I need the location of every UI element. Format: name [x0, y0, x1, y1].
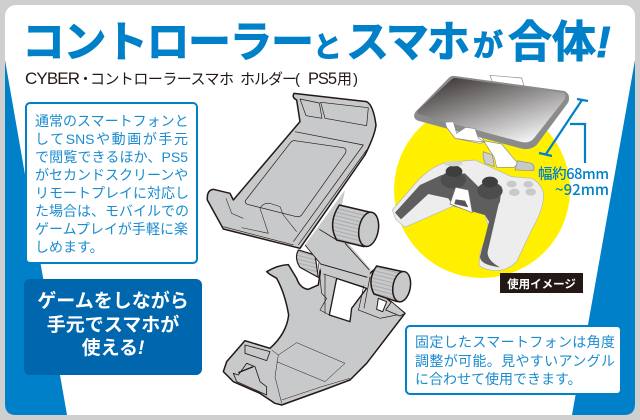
subtitle: CYBER	[25, 69, 80, 88]
upper knob	[333, 205, 369, 247]
smartphone	[414, 76, 569, 149]
subtitle	[25, 69, 358, 88]
holder upper cradle	[207, 93, 376, 248]
image caption	[500, 273, 583, 293]
holder lower base	[223, 263, 405, 405]
dark blue callout: 手元でスマホが	[47, 315, 179, 336]
lower knob	[371, 266, 403, 302]
phone mount arms	[445, 75, 534, 171]
width label: ~92mm	[555, 179, 609, 200]
left description box: しめます。	[35, 239, 104, 255]
dark blue callout	[24, 279, 202, 375]
left description box: た場合は、モバイルでの	[35, 203, 189, 219]
subtitle: (	[295, 71, 300, 88]
title: !	[596, 18, 611, 67]
controller illustration	[392, 160, 544, 271]
title: コントローラー	[22, 19, 314, 67]
dark blue callout: ゲームをしながら	[37, 291, 189, 312]
subtitle: PS5	[308, 70, 337, 88]
right description box: 調整が可能。見やすいアングル	[415, 353, 615, 369]
left blue wedge	[5, 60, 67, 415]
dark blue callout: 使える!	[82, 338, 144, 359]
subtitle: )	[353, 71, 358, 88]
left description box: リモートプレイに対応し	[35, 185, 189, 201]
left description box	[25, 102, 198, 264]
right description box: 固定したスマートフォンは角度	[415, 334, 615, 350]
width dimension marker	[539, 99, 588, 163]
title: 合体	[508, 18, 596, 67]
title	[22, 18, 611, 67]
left description box: ゲームプレイが手軽に楽	[35, 221, 188, 237]
width label: 幅約68mm	[538, 163, 609, 184]
left description box: してSNSや動画が手元	[35, 131, 188, 147]
title: スマホ	[346, 19, 470, 67]
subtitle: ホルダー	[240, 71, 297, 88]
image caption: 使用イメージ	[507, 277, 576, 291]
left description box: 通常のスマートフォンと	[35, 113, 189, 129]
top clamp	[490, 75, 524, 86]
holder neck and knobs	[297, 190, 413, 303]
left description box: で閲覧できるほか、PS5	[35, 149, 188, 165]
right description box	[405, 325, 622, 395]
right blue wedge	[572, 60, 635, 415]
right description box: に合わせて使用できます。	[415, 371, 582, 387]
subtitle: コントローラースマホ	[90, 71, 234, 88]
width label	[538, 163, 609, 200]
subtitle: ・	[78, 71, 93, 88]
subtitle: 用	[337, 71, 352, 88]
title: と	[313, 32, 342, 64]
left description box: がセカンドスクリーンや	[35, 167, 188, 183]
title: が	[473, 29, 503, 63]
yellow circle	[394, 102, 570, 278]
